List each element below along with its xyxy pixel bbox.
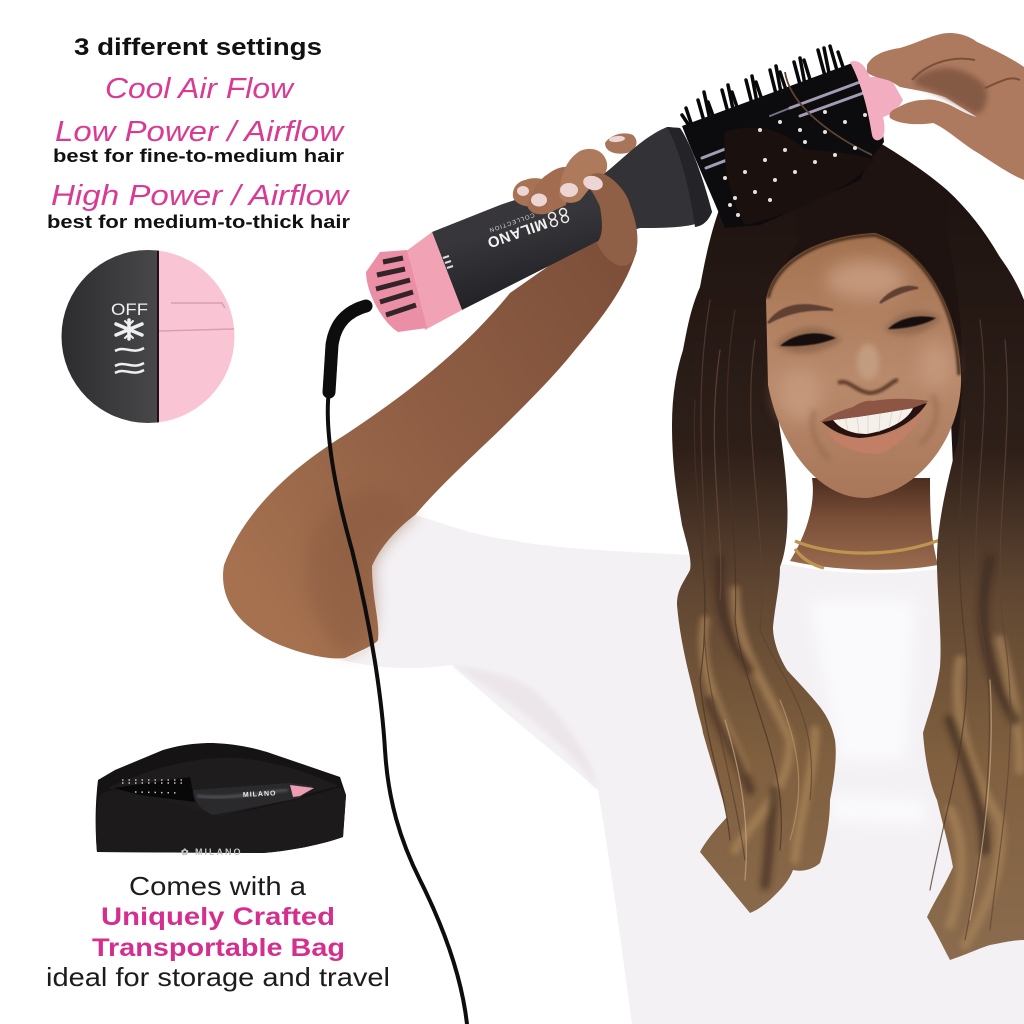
setting: high power: High Power / Airflow bbox=[51, 180, 350, 212]
face shape bbox=[766, 233, 961, 498]
smile folds bbox=[812, 395, 937, 460]
caption line one: Comes with a bbox=[129, 871, 307, 901]
brand clover mark bbox=[548, 208, 568, 226]
shirt lower band bbox=[830, 795, 925, 825]
caption line four: ideal for storage and travel bbox=[46, 962, 390, 992]
tooth gaps bbox=[845, 410, 902, 434]
raised arm and palm bbox=[223, 230, 637, 658]
bag interior lining bbox=[108, 758, 338, 817]
right caramel strands bbox=[950, 640, 1020, 945]
hand on brush cap bbox=[867, 33, 1024, 180]
barrel metallic vents bbox=[702, 82, 866, 168]
shirt chest highlight bbox=[810, 600, 915, 760]
bristle tips in bag bbox=[122, 780, 186, 793]
left eyebrow bbox=[768, 305, 833, 323]
face bbox=[766, 233, 961, 498]
brush bristles bbox=[682, 46, 844, 132]
bag brand text: MILANO bbox=[243, 790, 277, 799]
brand subtitle: COLLECTION bbox=[488, 211, 535, 233]
right eyebrow bbox=[880, 287, 918, 303]
back hair top bbox=[720, 143, 1024, 620]
bag logo: ✿ MILANO bbox=[181, 847, 243, 857]
brush bristle tips bbox=[723, 110, 867, 217]
panel: storage bag bbox=[96, 743, 346, 857]
panel: switch close-up dial bbox=[60, 248, 236, 426]
pink end in bag bbox=[290, 785, 314, 797]
nose highlight bbox=[857, 344, 879, 380]
dryer head bbox=[598, 127, 712, 240]
neck bbox=[790, 478, 938, 570]
fingernails bbox=[517, 135, 625, 206]
shirt light folds bbox=[810, 600, 925, 825]
upper lip bbox=[820, 399, 929, 422]
hair wrapped in brush bbox=[724, 128, 875, 225]
necklace bbox=[795, 540, 940, 568]
finger pinky bbox=[513, 178, 545, 207]
pink vent cap bbox=[366, 250, 427, 332]
dial off label: OFF bbox=[111, 300, 148, 319]
caption highlight one: Uniquely Crafted bbox=[101, 903, 335, 931]
dryer in bag bbox=[193, 783, 313, 815]
left caramel strands bbox=[703, 590, 815, 860]
dryer cord bbox=[328, 306, 467, 1024]
shirt fold shading bbox=[452, 665, 598, 790]
stray hair strand bbox=[785, 72, 872, 155]
forehead hair edge bbox=[768, 235, 959, 375]
photo: model with hair dryer brush bbox=[223, 33, 1024, 1024]
hair strands bbox=[694, 300, 1010, 940]
hair left mass bbox=[672, 200, 836, 913]
hand fingers over handle bbox=[513, 135, 637, 266]
dryer highlight in bag bbox=[197, 790, 288, 797]
eye socket shadows bbox=[775, 311, 942, 353]
lower lip bbox=[827, 403, 929, 454]
brand logo wordmark: MILANO bbox=[485, 214, 549, 251]
cord main bbox=[328, 390, 467, 1024]
finger middle bbox=[559, 149, 607, 203]
elbow shading bbox=[307, 489, 415, 655]
nose underside bbox=[838, 380, 898, 393]
dial circle halves bbox=[60, 248, 236, 426]
right eye bbox=[888, 316, 936, 329]
hand finger creases bbox=[912, 59, 1020, 88]
mouth interior bbox=[822, 403, 927, 438]
hair dryer brush bbox=[366, 46, 903, 332]
setting: high power description: best for medium-to-thick hair bbox=[47, 212, 350, 232]
model torso shirt bbox=[342, 515, 1024, 1024]
dryer head rim bbox=[667, 127, 712, 227]
thumb bbox=[583, 173, 637, 266]
brush in bag bbox=[113, 777, 195, 802]
caption highlight two: Transportable Bag bbox=[92, 934, 345, 962]
right dark strands bbox=[950, 560, 1015, 850]
finger ring bbox=[527, 167, 572, 214]
icon: low airflow wave bbox=[115, 348, 144, 351]
setting: cool air flow: Cool Air Flow bbox=[105, 73, 295, 105]
hand index fingertip bbox=[605, 133, 637, 154]
heading: settings bbox=[47, 34, 350, 232]
icon: high airflow waves bbox=[115, 363, 144, 373]
bag body back bbox=[96, 743, 346, 853]
brush barrel bbox=[682, 62, 884, 228]
hair right mass bbox=[923, 200, 1024, 960]
switch marks bbox=[443, 256, 453, 268]
setting: low power: Low Power / Airflow bbox=[55, 116, 345, 148]
settings title: 3 different settings bbox=[74, 34, 322, 61]
setting: low power description: best for fine-to-medium hair bbox=[53, 146, 344, 166]
left eye bbox=[780, 333, 836, 346]
icon: snowflake bbox=[116, 320, 142, 339]
bag front flap bbox=[96, 787, 346, 853]
left dark strands bbox=[710, 560, 775, 885]
teeth bbox=[833, 408, 913, 434]
pink collar bbox=[405, 232, 462, 330]
hair caramel highlights bbox=[703, 560, 1020, 945]
dryer handle body bbox=[432, 170, 612, 310]
cheek highlights bbox=[778, 260, 951, 421]
hand palm shadow bbox=[915, 68, 987, 115]
brush pink end cap bbox=[850, 61, 903, 140]
caption: transportable bag bbox=[46, 871, 390, 992]
cord strain relief bbox=[329, 306, 366, 392]
vent openings bbox=[376, 258, 416, 315]
